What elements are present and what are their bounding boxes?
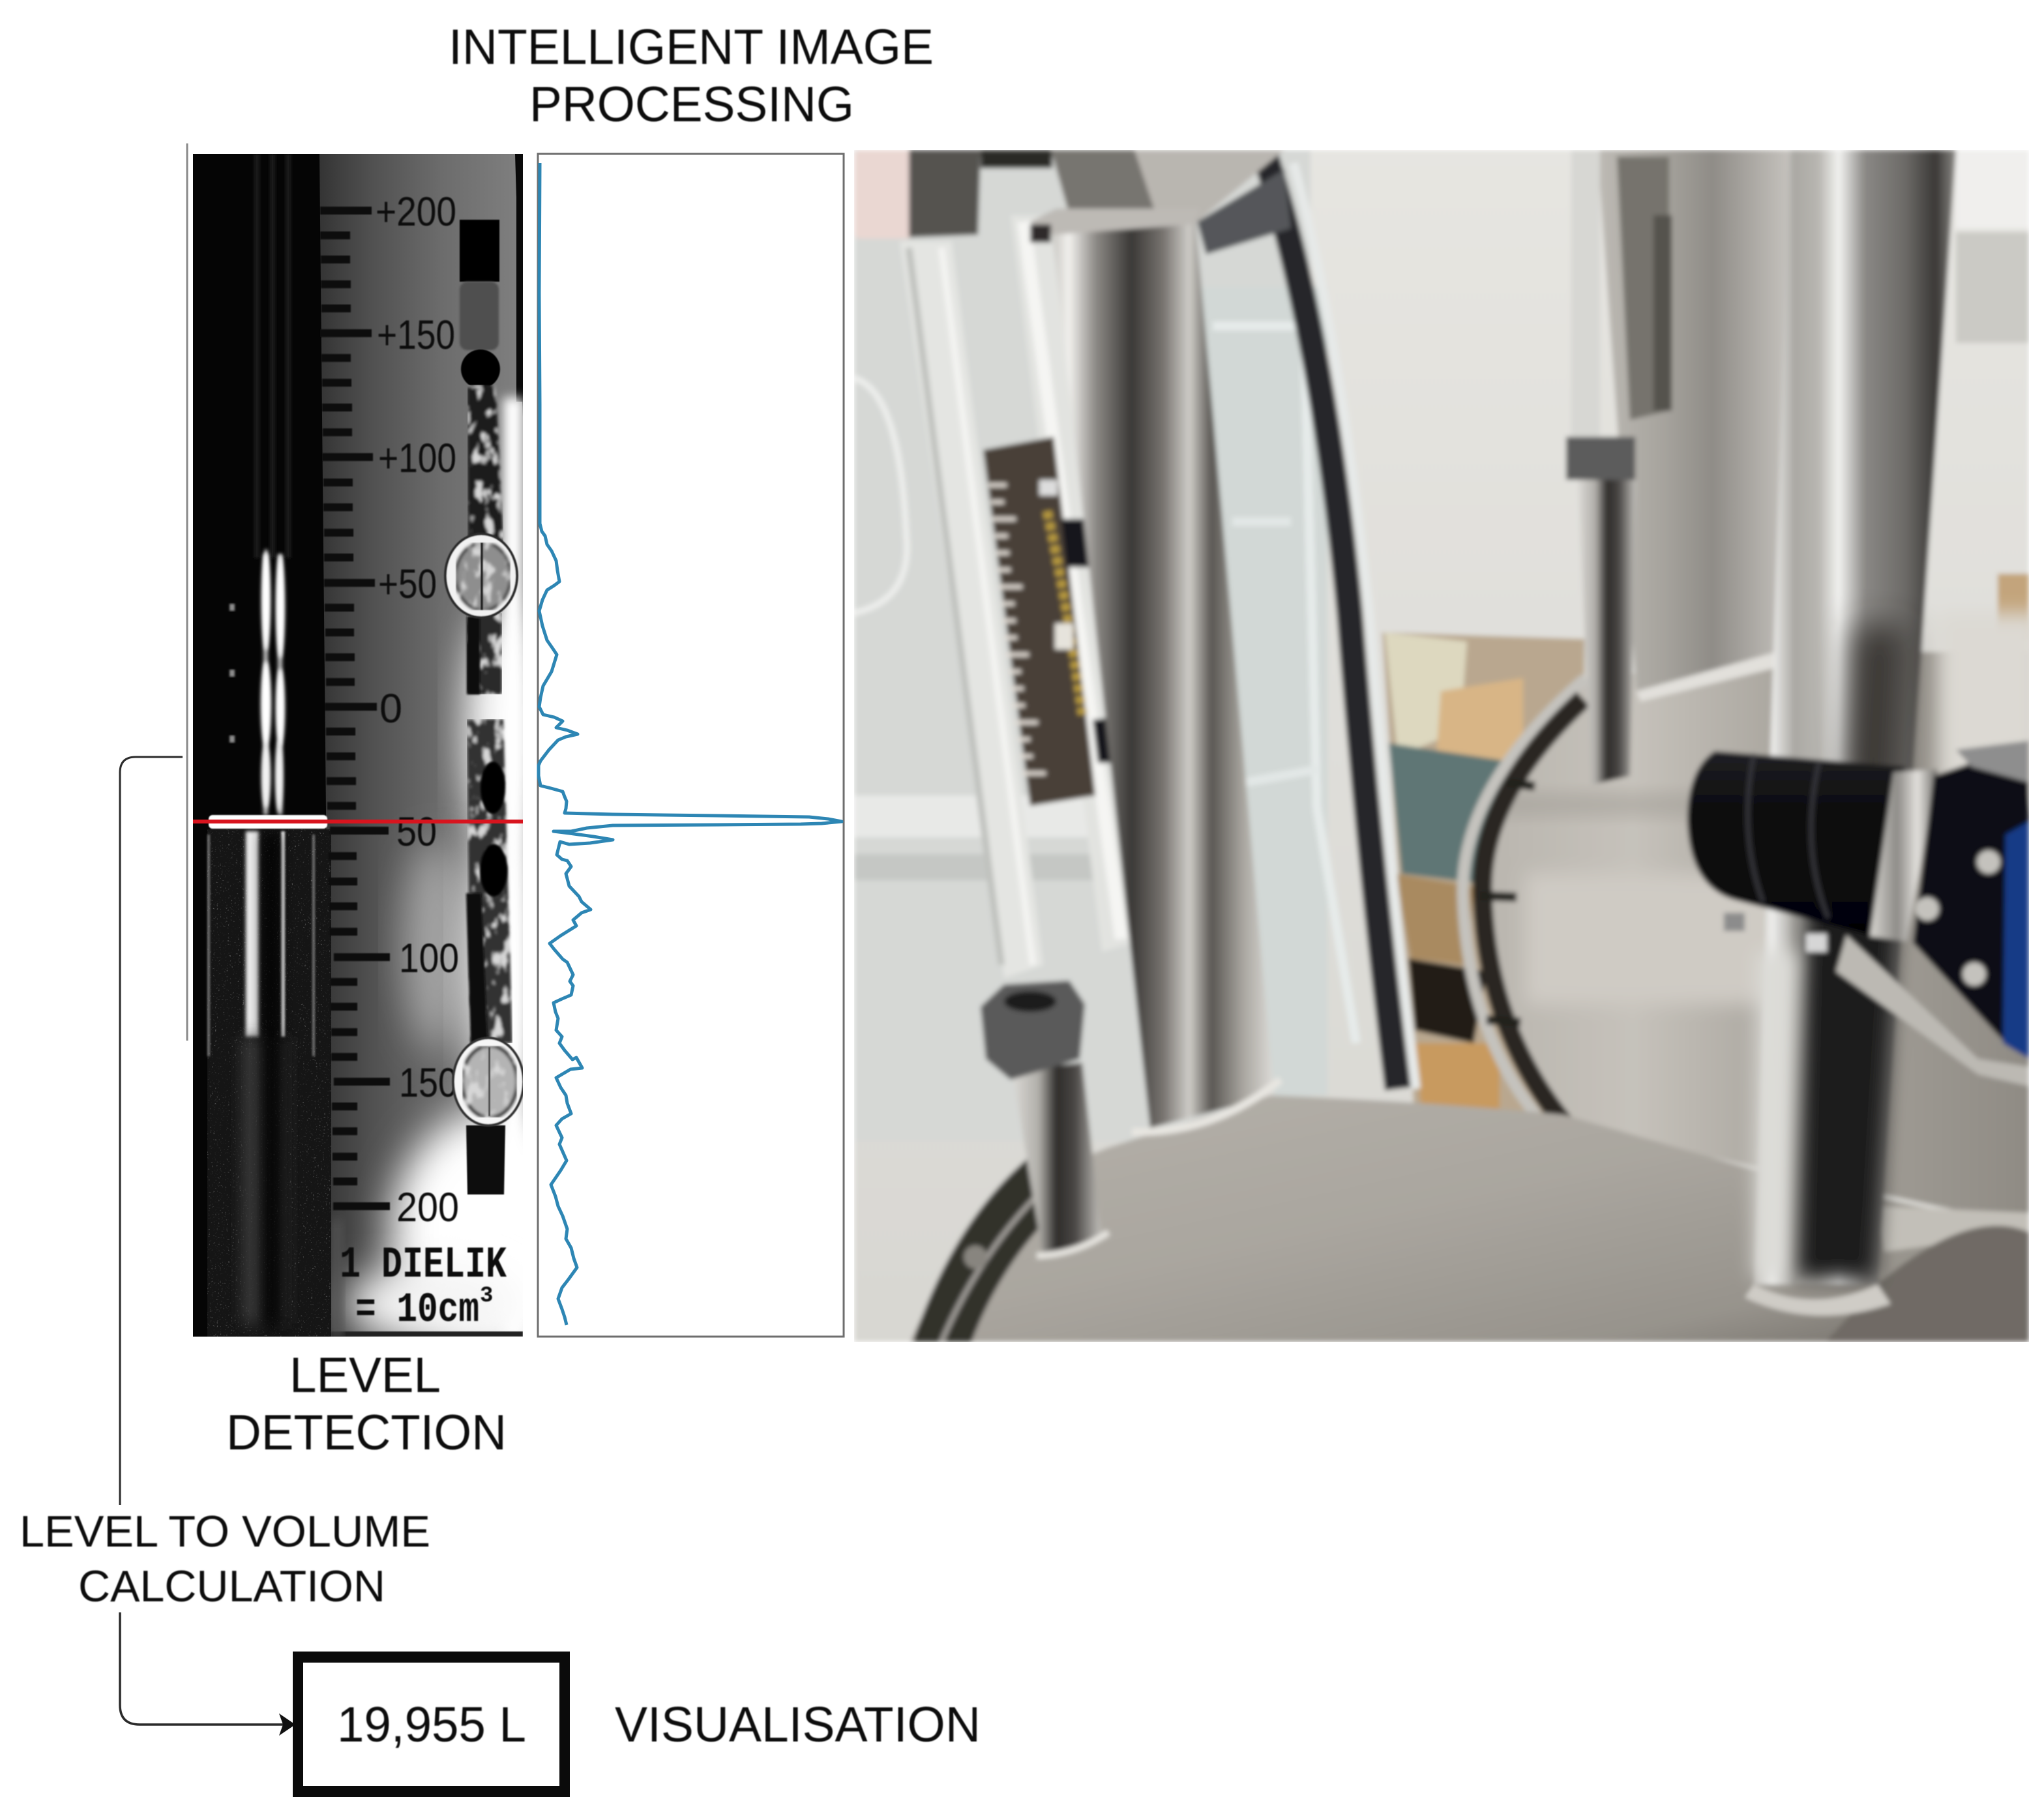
scale numbers — [376, 189, 459, 1230]
scale numbers: +150 — [377, 312, 455, 358]
panel: level gauge image — [193, 154, 523, 1337]
glass sight tube — [900, 215, 1148, 978]
label: level detection: LEVEL — [289, 1348, 441, 1403]
label: level to volume calculation: CALCULATION — [78, 1562, 385, 1611]
chart: intensity profile — [538, 154, 844, 1337]
rear vertical pipe and scale — [1566, 150, 1789, 785]
silver lens ring — [1870, 769, 1938, 941]
rear tank — [1479, 652, 2029, 1226]
gauge legend: = 10cm — [355, 1287, 479, 1334]
sight tube lower fitting — [981, 981, 1108, 1258]
label: level to volume calculation — [20, 1507, 430, 1611]
scale numbers: +100 — [378, 436, 456, 481]
photo background walls — [854, 150, 2029, 1342]
scale numbers: 100 — [399, 936, 459, 981]
heading: intelligent image processing — [449, 20, 934, 132]
rear tank flange — [1463, 678, 1586, 1124]
panel: photograph of the tank, camera and sight glass — [854, 150, 2042, 1342]
gauge legend — [342, 1247, 507, 1322]
camera body — [1913, 763, 2029, 1059]
scale numbers: 200 — [396, 1185, 459, 1230]
heading: intelligent image processing: INTELLIGENT IMAGE — [449, 20, 934, 75]
top-left fitting — [854, 150, 1052, 239]
gauge plate — [319, 154, 523, 1337]
label: level detection — [226, 1348, 507, 1460]
gauge legend: 1 DIELIK — [340, 1240, 507, 1290]
label: level detection: DETECTION — [226, 1405, 507, 1460]
arrow: calculation to display — [120, 1612, 295, 1736]
scale ticks — [320, 211, 390, 1206]
volume readout box — [293, 1652, 570, 1797]
main chrome pipe — [1030, 150, 1284, 1128]
label: level to volume calculation: LEVEL TO VOLUME — [20, 1507, 430, 1556]
connector: gauge to calculation — [120, 757, 183, 1505]
scale numbers: +200 — [376, 189, 456, 235]
lower gauge screw — [453, 1038, 524, 1125]
camera bracket — [1836, 935, 2029, 1086]
background clutter — [1382, 632, 1584, 1121]
scale numbers: 150 — [399, 1060, 458, 1106]
gauge legend: 3 — [480, 1284, 493, 1309]
heading: intelligent image processing: PROCESSING — [529, 77, 854, 132]
liquid meniscus band — [209, 815, 327, 829]
lens barrel — [1687, 751, 1905, 935]
upper gauge screw — [445, 534, 517, 617]
detected level line — [193, 820, 523, 823]
scale numbers: 0 — [379, 686, 402, 732]
graduated scale plate — [983, 437, 1115, 806]
dark hose — [1265, 154, 1398, 1089]
scale numbers: +50 — [378, 561, 437, 607]
glass tube with reflections — [207, 154, 331, 1337]
chart frame — [538, 154, 844, 1337]
scale numbers: 50 — [396, 809, 437, 855]
slot and sight strip — [460, 220, 512, 1194]
volume readout box: 19,955 L — [337, 1697, 526, 1753]
right chrome pipe — [1745, 150, 1956, 1316]
label: visualisation: VISUALISATION — [615, 1697, 981, 1753]
front tank — [910, 1095, 2029, 1342]
profile curve — [539, 163, 842, 1325]
machine vision camera — [1687, 741, 2029, 1059]
vertical rule left of gauge — [186, 143, 188, 1041]
